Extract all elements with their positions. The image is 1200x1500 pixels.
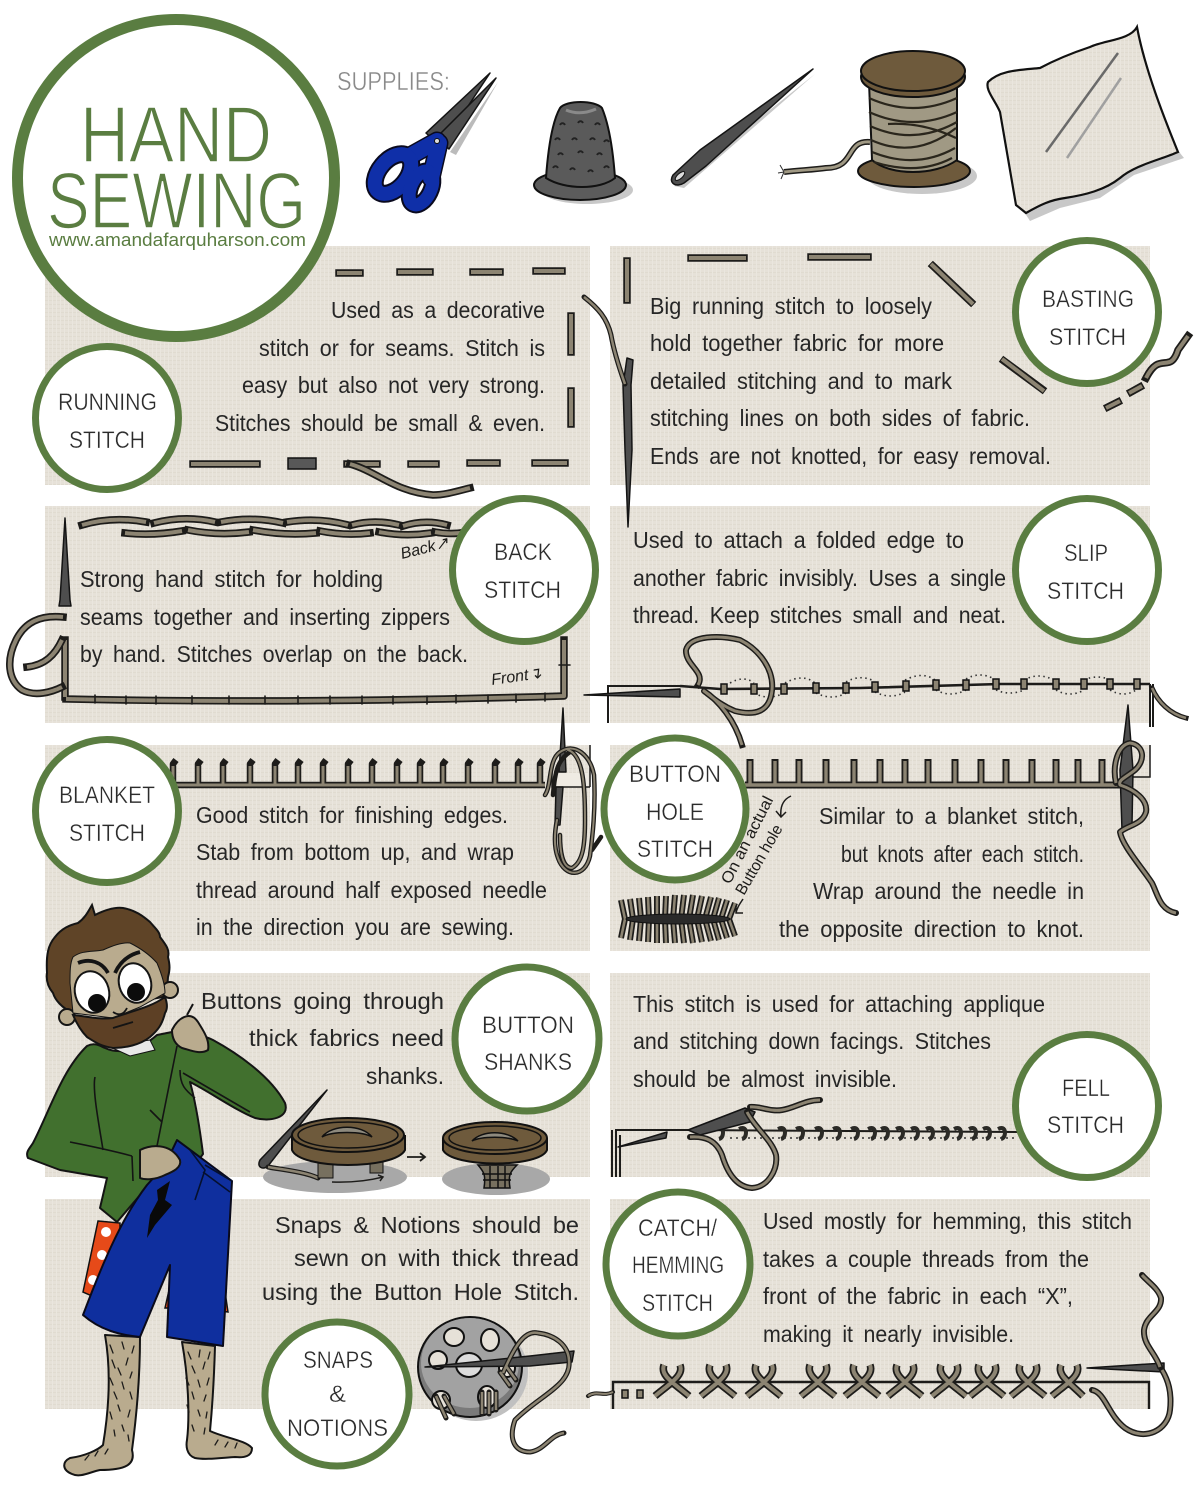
- handwritten note: on an actual button hole: Button hole: [733, 822, 787, 898]
- icon: long needle and thread between top panels: [584, 297, 633, 527]
- title: hand: HAND: [80, 90, 272, 179]
- thread loop: slip stitch: [686, 637, 772, 745]
- text: button shanks description: shanks.: [366, 1063, 444, 1089]
- text: snaps description: using the Button Hole Stitch.: [262, 1279, 579, 1305]
- text: fell stitch description: and stitching down facings. Stitches: [633, 1028, 991, 1054]
- icon: button with finished shank: [442, 1122, 550, 1195]
- text: running stitch description: Used as a decorative: [331, 297, 545, 323]
- handwritten label: back: Back↗: [399, 534, 451, 563]
- stitches: back stitch rectangle: [65, 519, 570, 704]
- badge: button hole stitch: BUTTON: [629, 761, 721, 788]
- badge: fell stitch: FELL: [1062, 1075, 1110, 1102]
- badge: slip stitch: STITCH: [1047, 578, 1124, 605]
- text: button shanks description: Buttons going through: [201, 988, 444, 1014]
- panel: button hole stitch background: [610, 745, 1150, 951]
- patterned underwear: [83, 1221, 228, 1312]
- badge: running stitch: STITCH: [69, 427, 145, 454]
- text: slip stitch description: Used to attach a folded edge to: [633, 527, 964, 553]
- text: blanket stitch description: [196, 802, 547, 940]
- text: blanket stitch description: Stab from bottom up, and wrap: [196, 839, 514, 865]
- text: blanket stitch description: thread around half exposed needle: [196, 877, 547, 903]
- panel: running stitch content: [191, 271, 571, 495]
- panel: blanket stitch background: [45, 745, 590, 951]
- text: running stitch description: Stitches should be small & even.: [215, 410, 545, 436]
- badge: blanket stitch: [36, 740, 178, 882]
- icon: thread spool: [778, 51, 977, 194]
- icon: slip stitch needle: [584, 689, 680, 697]
- text: back stitch description: by hand. Stitches overlap on the back.: [80, 641, 468, 667]
- icon: back stitch needle: [59, 518, 71, 606]
- text: button shanks description: [201, 988, 444, 1089]
- badge: snaps and notions: &: [329, 1381, 346, 1408]
- badge: snaps and notions: SNAPS: [303, 1347, 373, 1374]
- panel: button shanks content: [201, 988, 550, 1195]
- text: slip stitch description: [633, 527, 1006, 628]
- text: back stitch description: seams together and inserting zippers: [80, 604, 450, 630]
- icon: fabric swatch: [987, 27, 1184, 221]
- handwritten label: front: Front↴: [490, 665, 543, 689]
- panel: button shanks background: [45, 973, 590, 1177]
- text: back stitch description: [80, 566, 468, 667]
- thread loop: fell stitch: [690, 1100, 820, 1188]
- panel: catch hemming stitch content: [588, 1208, 1171, 1434]
- panel: running stitch background: [45, 246, 590, 485]
- text: basting stitch description: stitching lines on both sides of fabric.: [650, 405, 1030, 431]
- badge: back stitch: [452, 498, 596, 642]
- text: blanket stitch description: in the direction you are sewing.: [196, 914, 514, 940]
- icon: catch stitch needle: [1087, 1363, 1164, 1372]
- badge: slip stitch: SLIP: [1064, 540, 1108, 567]
- text: catch stitch description: making it nearly invisible.: [763, 1321, 1014, 1347]
- text: button hole stitch description: but knots after each stitch.: [841, 841, 1084, 867]
- badge: button shanks: BUTTON: [482, 1012, 574, 1039]
- badge: blanket stitch: BLANKET: [59, 782, 155, 809]
- icon: fell stitch needle: [688, 1108, 755, 1135]
- text: fell stitch description: should be almost invisible.: [633, 1066, 897, 1092]
- icon: thimble: [534, 102, 633, 204]
- text: slip stitch description: thread. Keep stitches small and neat.: [633, 602, 1006, 628]
- text: catch stitch description: Used mostly for hemming, this stitch: [763, 1208, 1132, 1234]
- panel: fell stitch background: [610, 973, 1150, 1177]
- hands, needle and thread: [140, 1004, 208, 1179]
- arrow: button to shank: [407, 1153, 425, 1161]
- badge: snaps and notions: [265, 1322, 409, 1466]
- panel: fell stitch content: [612, 991, 1045, 1188]
- badge: catch hemming stitch: CATCH/: [638, 1215, 717, 1242]
- badge: back stitch: STITCH: [484, 577, 561, 604]
- panel: catch hemming stitch background: [610, 1199, 1150, 1409]
- panel: slip stitch background: [610, 506, 1150, 723]
- badge: running stitch: RUNNING: [58, 389, 157, 416]
- badge: catch hemming stitch: [606, 1192, 750, 1336]
- handwritten note: on an actual button hole: [718, 794, 791, 913]
- stitches: button hole: [745, 745, 1150, 785]
- panel: blanket stitch content: [168, 708, 601, 940]
- illustration: bearded man mending shorts: [27, 905, 286, 1475]
- website url: www.amandafarquharson.com: [48, 230, 306, 250]
- text: fell stitch description: This stitch is used for attaching applique: [633, 991, 1045, 1017]
- panel: snaps and notions background: [45, 1199, 590, 1409]
- title badge: [18, 20, 334, 336]
- text: blanket stitch description: Good stitch for finishing edges.: [196, 802, 508, 828]
- icon: scissors: [367, 73, 498, 209]
- badge: basting stitch: BASTING: [1042, 286, 1134, 313]
- legs and feet: [64, 1335, 252, 1475]
- badge: button hole stitch: STITCH: [637, 836, 713, 863]
- title: sewing: SEWING: [47, 156, 306, 245]
- badge: catch hemming stitch: STITCH: [642, 1290, 713, 1317]
- panel: back stitch background: [45, 506, 590, 723]
- panel: basting stitch background: [610, 246, 1150, 485]
- badge: fell stitch: [1016, 1034, 1158, 1178]
- text: catch stitch description: front of the fabric in each “X”,: [763, 1283, 1073, 1309]
- panel: slip stitch content: [584, 527, 1186, 745]
- icon: snap with thread: [418, 1317, 574, 1452]
- stitches: running: [191, 271, 571, 495]
- text: snaps description: sewn on with thick thread: [294, 1245, 579, 1271]
- text: button hole stitch description: the opposite direction to knot.: [779, 916, 1084, 942]
- badge: slip stitch: [1016, 498, 1158, 642]
- text: basting stitch description: [650, 293, 1051, 469]
- badge: blanket stitch: STITCH: [69, 820, 145, 847]
- green sweater: [27, 1031, 286, 1222]
- text: snaps description: Snaps & Notions should be: [275, 1212, 579, 1238]
- text: basting stitch description: detailed stitching and to mark: [650, 368, 952, 394]
- icon: needle: [671, 69, 815, 188]
- text: basting stitch description: Big running stitch to loosely: [650, 293, 932, 319]
- handwritten note: on an actual button hole: On an actual: [718, 794, 777, 887]
- text: basting stitch description: hold together fabric for more: [650, 330, 944, 356]
- text: running stitch description: stitch or for seams. Stitch is: [259, 335, 545, 361]
- panel: button hole stitch content: [621, 705, 1176, 943]
- badge: button shanks: SHANKS: [484, 1049, 572, 1076]
- panel: back stitch content: [10, 518, 570, 704]
- icon: sewn button hole: [621, 895, 735, 943]
- stitches: blanket: [168, 760, 545, 785]
- blue shorts: [83, 1140, 232, 1346]
- thread loop: back stitch: [10, 617, 63, 693]
- text: button hole stitch description: Wrap around the needle in: [813, 878, 1084, 904]
- text: catch stitch description: [763, 1208, 1132, 1347]
- badge: catch hemming stitch: HEMMING: [632, 1252, 724, 1279]
- text: slip stitch description: another fabric invisibly. Uses a single: [633, 565, 1006, 591]
- text: fell stitch description: [633, 991, 1045, 1092]
- badge: running stitch: [36, 346, 178, 490]
- stitches: catch: [588, 1365, 1149, 1409]
- badge: button shanks: [455, 967, 599, 1111]
- badge: basting stitch: STITCH: [1049, 324, 1126, 351]
- icon: button hole needle and thread: [1115, 705, 1176, 913]
- badge: fell stitch: STITCH: [1047, 1112, 1124, 1139]
- panel: basting stitch content: [627, 257, 1188, 469]
- thread loop: catch stitch: [1092, 1275, 1171, 1434]
- badge: button hole stitch: HOLE: [646, 799, 704, 826]
- supplies heading: SUPPLIES:: [337, 66, 450, 96]
- badge: basting stitch: [1016, 240, 1158, 384]
- text: basting stitch description: Ends are not knotted, for easy removal.: [650, 443, 1051, 469]
- text: running stitch description: [215, 297, 545, 436]
- icon: blanket stitch needle and thread: [545, 708, 601, 873]
- stitches: basting: [627, 257, 1188, 408]
- badge: snaps and notions: NOTIONS: [287, 1415, 388, 1442]
- panel: snaps and notions content: [262, 1212, 579, 1452]
- text: button hole stitch description: [779, 803, 1084, 942]
- head with hair, beard and eyes: [47, 905, 178, 1048]
- text: back stitch description: Strong hand stitch for holding: [80, 566, 383, 592]
- text: running stitch description: easy but also not very strong.: [242, 372, 545, 398]
- badge: button hole stitch: [604, 738, 746, 880]
- badge: back stitch: BACK: [494, 539, 552, 566]
- text: button hole stitch description: Similar to a blanket stitch,: [819, 803, 1084, 829]
- text: snaps description: [262, 1212, 579, 1305]
- stitches: slip: [608, 675, 1186, 727]
- text: catch stitch description: takes a couple threads from the: [763, 1246, 1089, 1272]
- stitches: fell: [612, 1128, 1018, 1177]
- text: button shanks description: thick fabrics need: [249, 1025, 444, 1051]
- icon: button with needle: [259, 1090, 407, 1193]
